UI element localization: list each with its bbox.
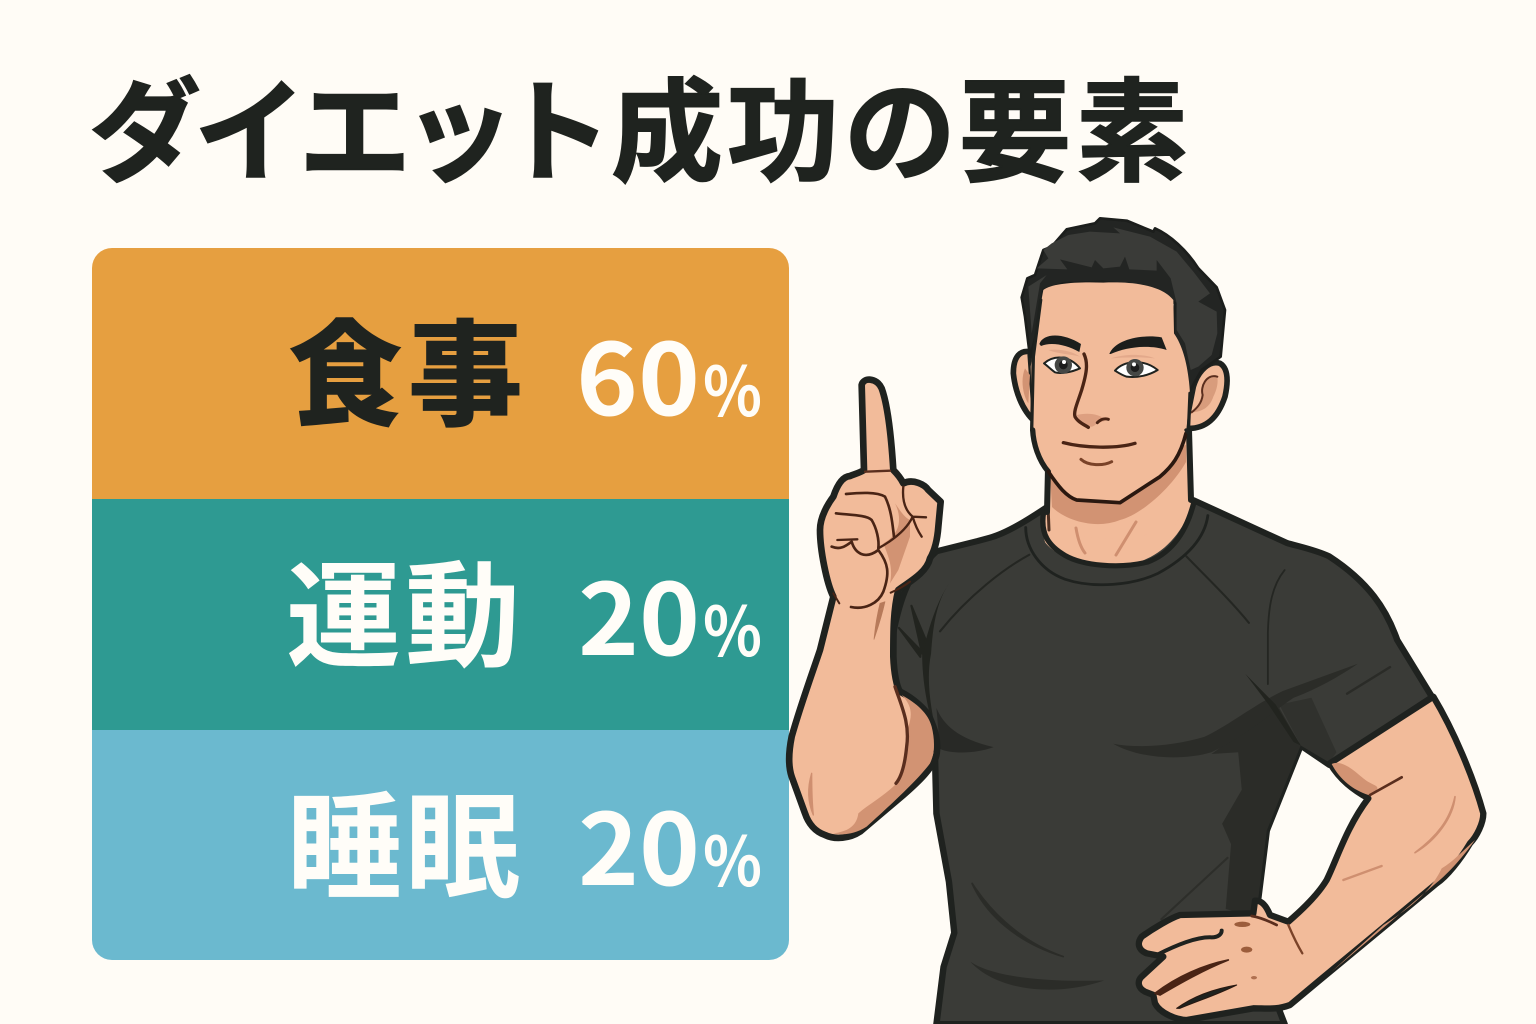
panel: exercise 20%: 運動 bbox=[286, 525, 520, 691]
nose bbox=[1077, 414, 1106, 427]
hair bbox=[1022, 218, 1225, 392]
panel: sleep 20%: 20 bbox=[578, 770, 700, 914]
face bbox=[1031, 282, 1190, 502]
panel: diet 60%: 60 bbox=[576, 300, 700, 444]
panel: sleep 20%: 睡眠 bbox=[287, 756, 520, 922]
panel: exercise 20%: % bbox=[703, 577, 762, 676]
panel: sleep 20% bbox=[92, 730, 789, 960]
head bbox=[1013, 218, 1227, 503]
shirt shading bbox=[1211, 708, 1301, 916]
neck skin bbox=[1043, 490, 1194, 567]
mouth bbox=[1063, 443, 1135, 447]
collar bbox=[1026, 516, 1208, 585]
panel: sleep 20%: % bbox=[703, 807, 762, 906]
right arm and hand on hip bbox=[1139, 697, 1483, 1020]
title: ダイエット成功の要素 bbox=[89, 43, 1188, 205]
neck bbox=[1047, 430, 1191, 555]
panel: diet 60%: 食事 bbox=[288, 284, 523, 450]
panel: diet 60% bbox=[92, 248, 789, 499]
shirt bbox=[892, 490, 1432, 1024]
left arm with raised index finger bbox=[789, 380, 941, 838]
eyes bbox=[1044, 357, 1080, 373]
panel: exercise 20% bbox=[92, 499, 789, 730]
panel: stacked ratio table bbox=[92, 248, 789, 960]
eyebrows bbox=[1039, 335, 1081, 352]
panel: exercise 20%: 20 bbox=[578, 540, 700, 684]
panel: diet 60%: % bbox=[703, 337, 762, 436]
ear: left bbox=[1013, 351, 1035, 422]
ear: right bbox=[1185, 363, 1227, 428]
illustration: man pointing up bbox=[789, 218, 1483, 1024]
